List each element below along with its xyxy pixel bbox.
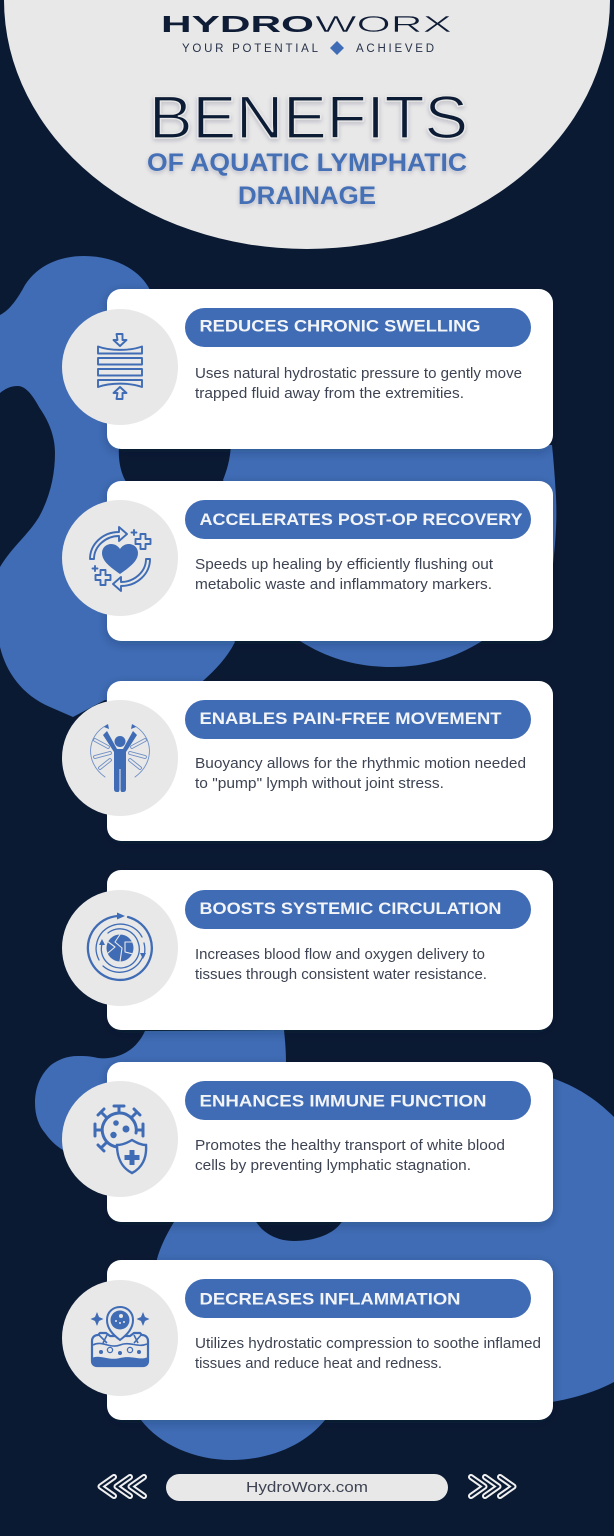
website pill xyxy=(166,1474,448,1501)
card 3: enables pain-free movement: to "pump" lymph without joint stress. xyxy=(195,775,444,792)
card 2: accelerates post-op recovery: Speeds up healing by efficiently flushing out xyxy=(195,556,494,573)
card 2: accelerates post-op recovery: ACCELERATES POST-OP RECOVERY xyxy=(200,511,522,529)
card 5: enhances immune function: Promotes the healthy transport of white blood xyxy=(195,1137,505,1154)
title: DRAINAGE xyxy=(238,182,376,210)
card 2: accelerates post-op recovery xyxy=(62,481,553,641)
icon: virus and shield xyxy=(95,1106,146,1173)
card 3: enables pain-free movement: ENABLES PAIN-FREE MOVEMENT xyxy=(200,710,502,728)
title xyxy=(147,84,468,210)
card 5: enhances immune function: cells by preventing lymphatic stagnation. xyxy=(195,1157,471,1174)
card 6: decreases inflammation: Utilizes hydrostatic compression to soothe inflamed xyxy=(195,1335,541,1352)
icon: right chevrons xyxy=(471,1477,514,1496)
header panel xyxy=(4,0,610,249)
card 6: decreases inflammation: tissues and reduce heat and redness. xyxy=(195,1355,442,1372)
icon: left chevrons xyxy=(100,1477,144,1496)
card 2: accelerates post-op recovery: metabolic waste and inflammatory markers. xyxy=(195,576,492,593)
title: BENEFITS xyxy=(149,84,468,151)
title: OF AQUATIC LYMPHATIC xyxy=(147,149,467,177)
icon: compression bands xyxy=(98,334,142,399)
icon: inflamed tissue with pin xyxy=(90,1307,150,1366)
card 6: decreases inflammation xyxy=(62,1260,553,1420)
icon: circulation rings and globe xyxy=(88,912,152,980)
logo: HYDRO xyxy=(161,11,314,37)
card 1: reduces chronic swelling: REDUCES CHRONIC SWELLING xyxy=(200,318,480,336)
card 1: reduces chronic swelling: trapped fluid away from the extremities. xyxy=(195,385,464,402)
card 3: enables pain-free movement xyxy=(62,681,553,841)
card 1: reduces chronic swelling xyxy=(62,289,553,449)
card 5: enhances immune function xyxy=(62,1062,553,1222)
website pill: HydroWorx.com xyxy=(246,1479,368,1496)
icon: heart with recovery arrows xyxy=(90,527,150,591)
card 6: decreases inflammation: DECREASES INFLAMMATION xyxy=(200,1290,460,1308)
logo: ACHIEVED xyxy=(356,43,434,55)
card 4: boosts systemic circulation: BOOSTS SYSTEMIC CIRCULATION xyxy=(200,900,502,918)
card 1: reduces chronic swelling: Uses natural hydrostatic pressure to gently move xyxy=(195,365,522,382)
background blobs xyxy=(0,256,614,1460)
card 4: boosts systemic circulation xyxy=(62,870,553,1030)
logo xyxy=(161,11,452,55)
card 3: enables pain-free movement: Buoyancy allows for the rhythmic motion needed xyxy=(195,755,526,772)
card 4: boosts systemic circulation: Increases blood flow and oxygen delivery to xyxy=(195,946,485,963)
footer xyxy=(100,1474,514,1501)
card 4: boosts systemic circulation: tissues through consistent water resistance. xyxy=(195,966,487,983)
icon: person with raised arms xyxy=(91,724,149,792)
logo: YOUR POTENTIAL xyxy=(182,43,319,55)
card 5: enhances immune function: ENHANCES IMMUNE FUNCTION xyxy=(200,1092,486,1110)
logo: WORX xyxy=(315,11,452,37)
